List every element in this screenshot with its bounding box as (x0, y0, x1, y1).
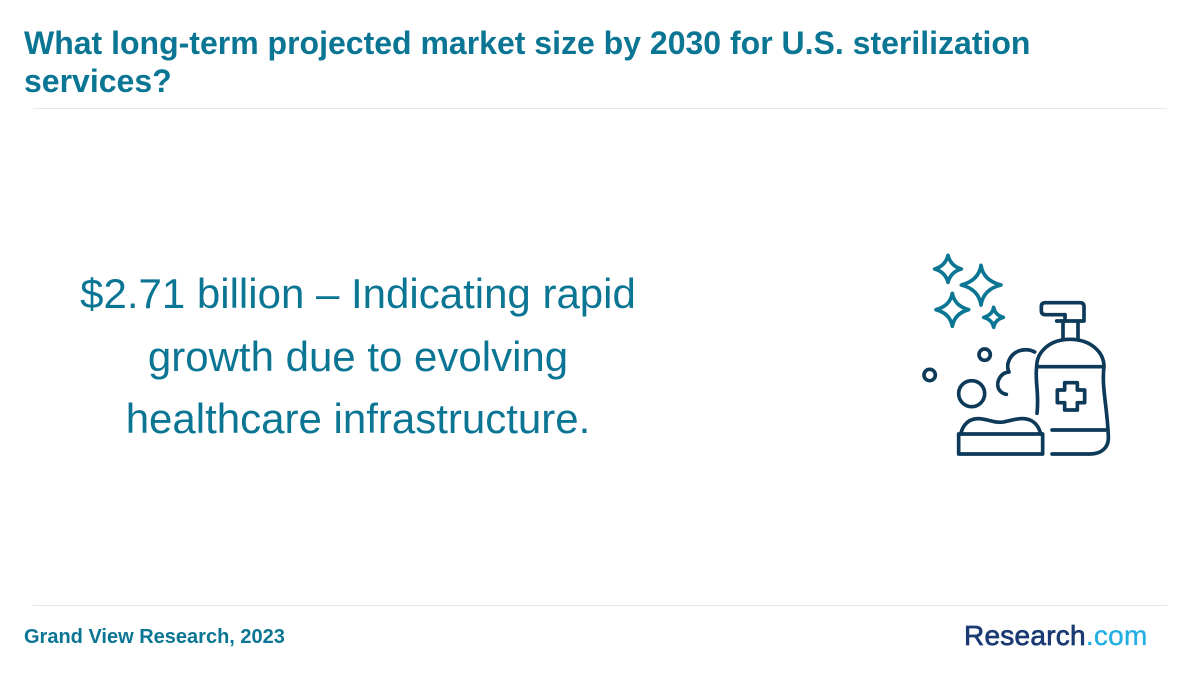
main statement: $2.71 billion – Indicating rapid (80, 270, 636, 317)
title (24, 25, 1030, 99)
main statement: healthcare infrastructure. (126, 395, 590, 442)
title: services? (24, 63, 172, 99)
source: Grand View Research, 2023 (24, 626, 285, 648)
icon: soap bottle with sparkles (922, 254, 1110, 456)
main statement (80, 270, 636, 442)
main statement: growth due to evolving (148, 332, 568, 380)
logo: Research.com (964, 620, 1148, 651)
title: What long-term projected market size by 2030 for U.S. sterilization (24, 25, 1030, 61)
